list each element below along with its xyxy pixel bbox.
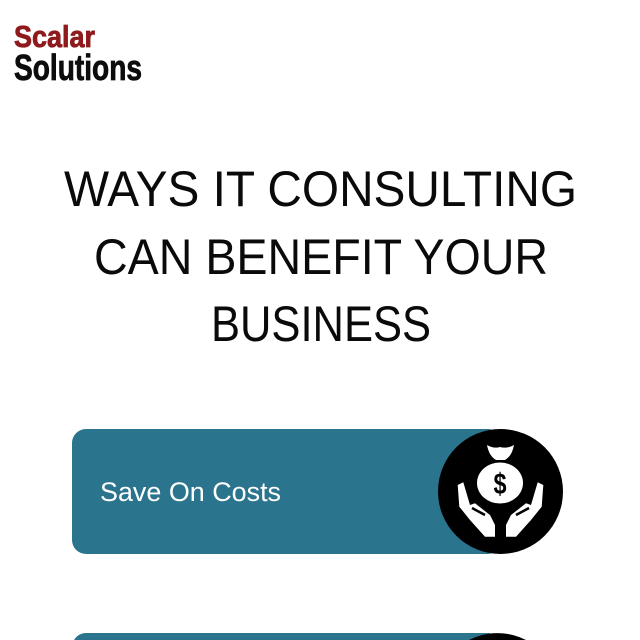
logo: Scalar Solutions: Solutions bbox=[14, 47, 142, 88]
teal banner bbox=[72, 429, 502, 554]
icon circle bbox=[469, 633, 526, 640]
icon: money bag in hands: $ bbox=[494, 468, 507, 501]
title bbox=[64, 161, 577, 352]
panel: next benefit (cropped) bbox=[74, 633, 526, 640]
teal banner bbox=[74, 633, 490, 640]
logo: Scalar Solutions bbox=[14, 19, 142, 88]
banner label: Save On Costs bbox=[100, 477, 281, 507]
title: WAYS IT CONSULTING bbox=[64, 161, 577, 217]
title: CAN BENEFIT YOUR bbox=[94, 229, 548, 285]
icon: money bag in hands bbox=[438, 429, 563, 554]
logo: Scalar Solutions: Scalar bbox=[14, 19, 95, 54]
title: BUSINESS bbox=[211, 296, 431, 352]
panel: Save On Costs bbox=[72, 429, 563, 554]
